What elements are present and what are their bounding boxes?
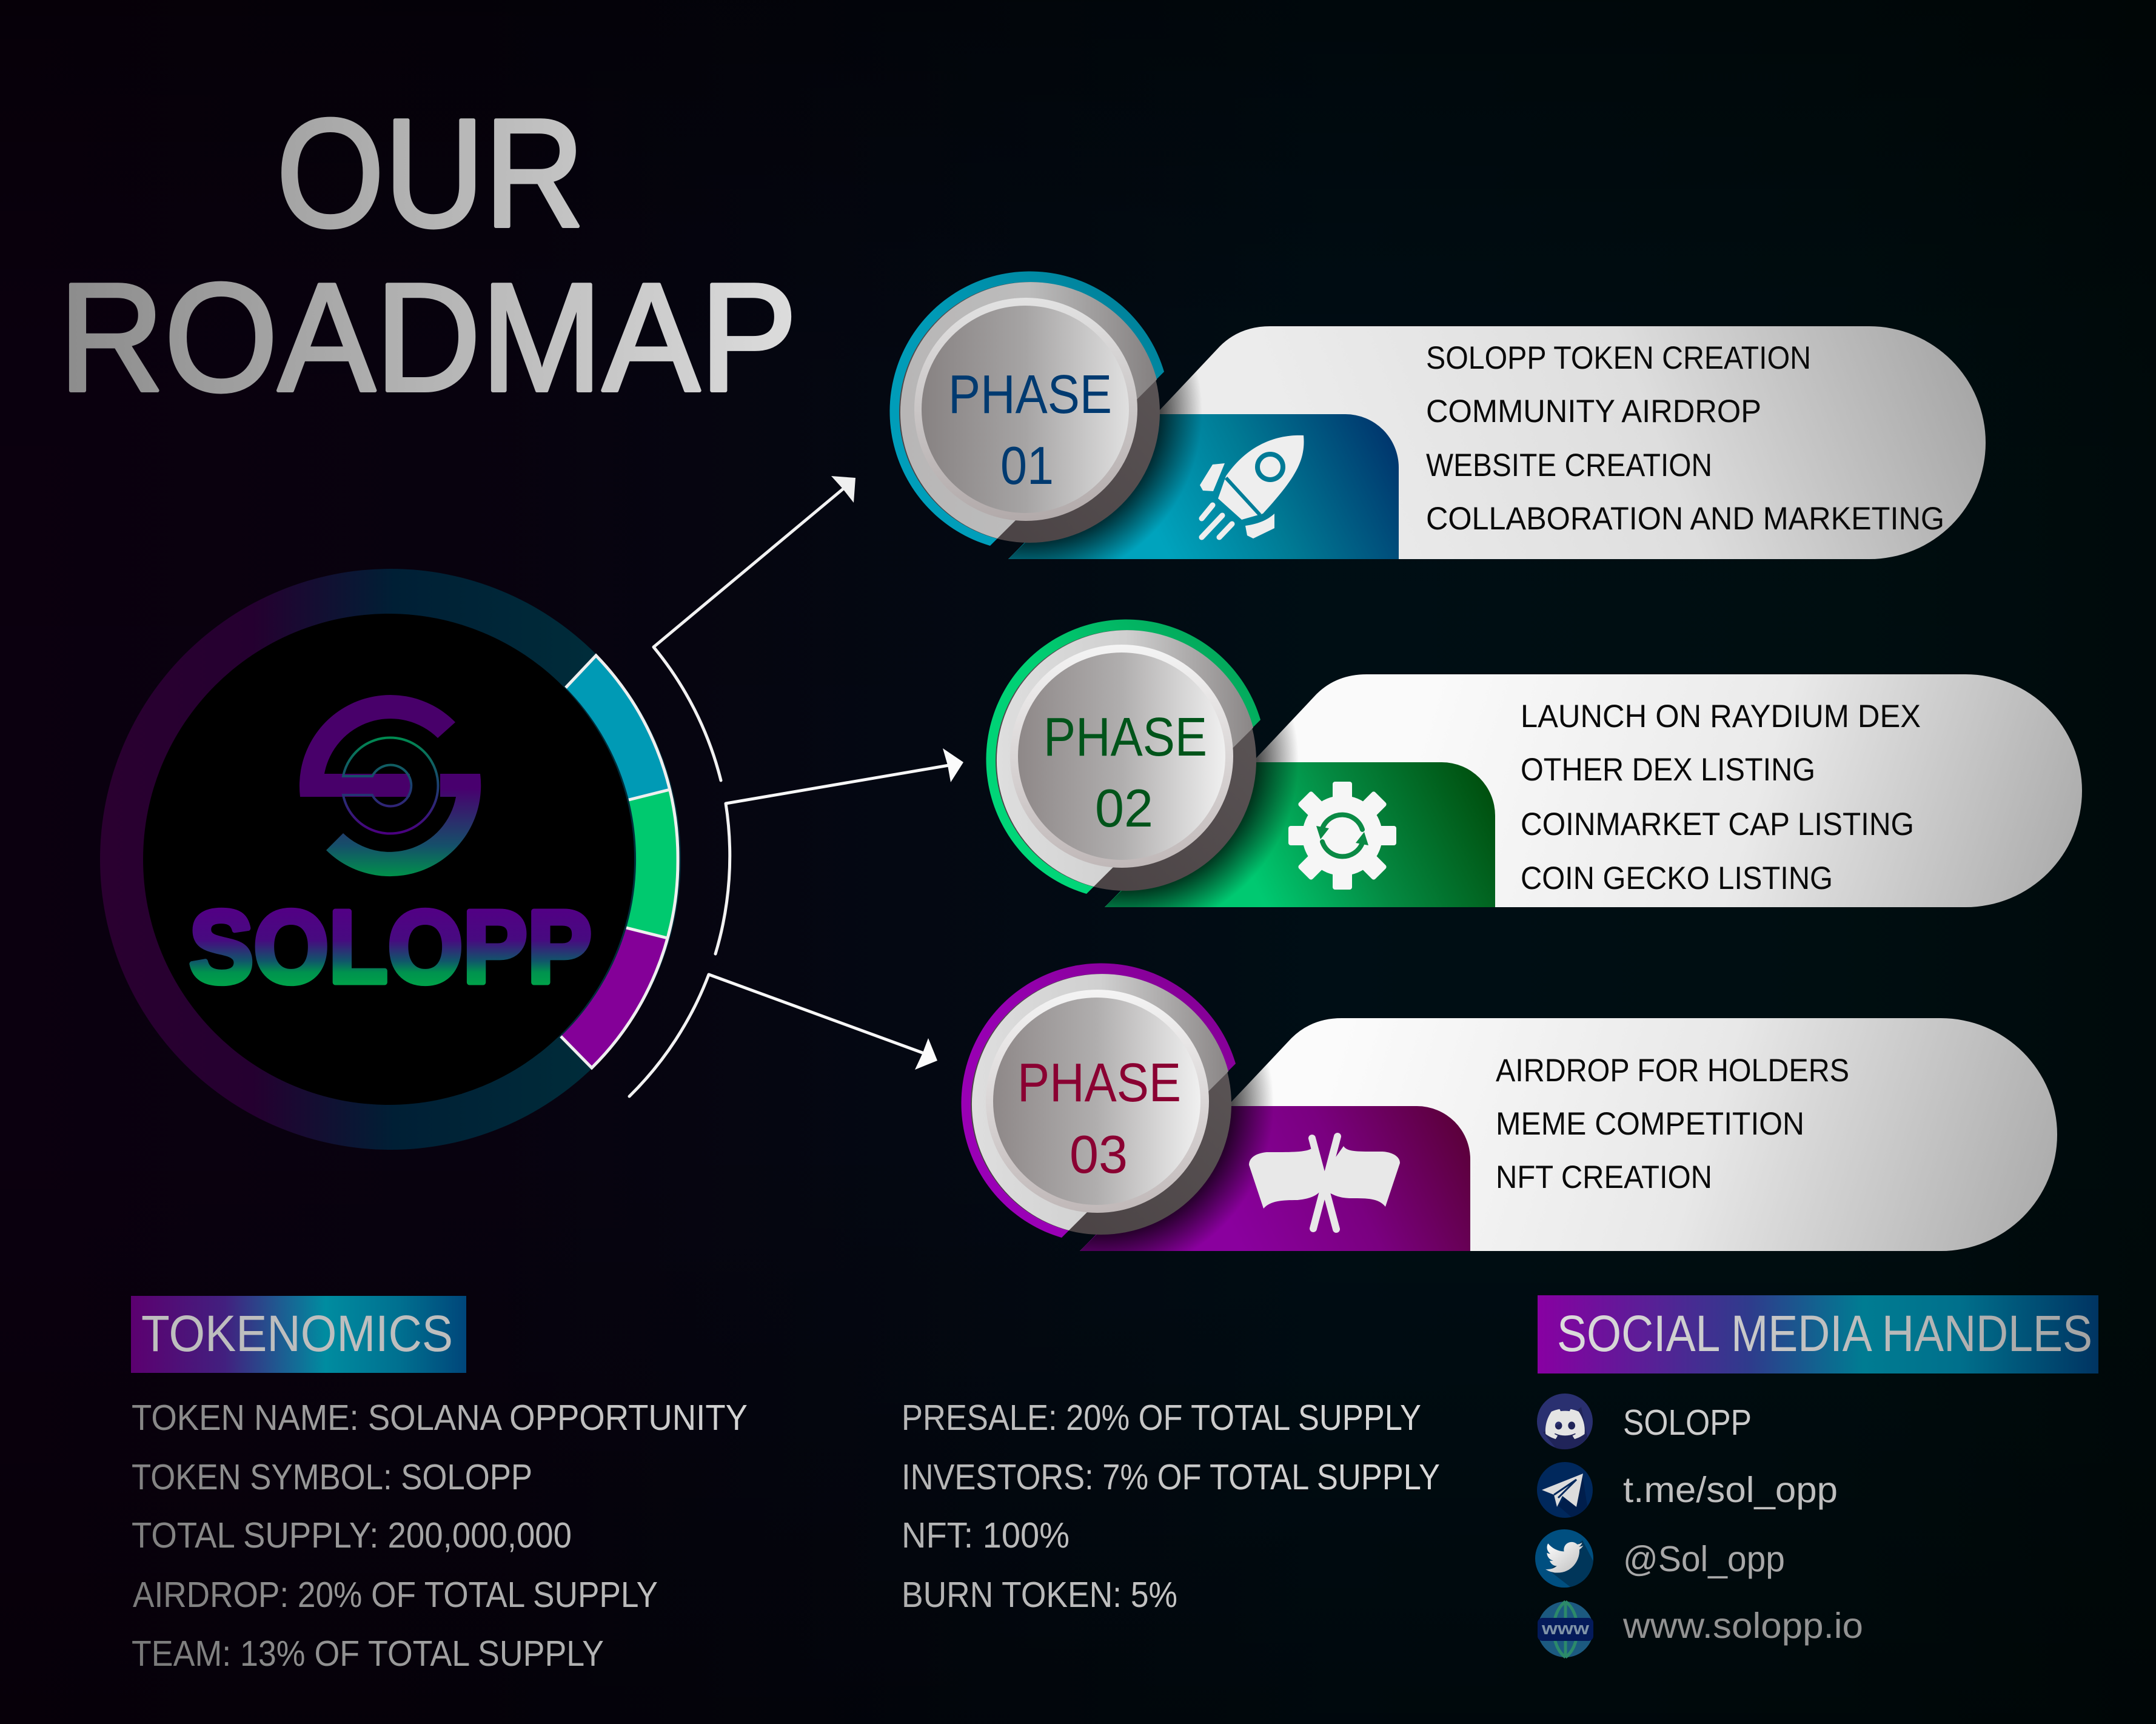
arrow to phase 01 (654, 476, 855, 647)
title (59, 87, 797, 423)
tokenomics middle column: PRESALE: 20% OF TOTAL SUPPLY (902, 1398, 1421, 1438)
phase 01 list: COLLABORATION AND MARKETING (1426, 501, 1944, 537)
social: twitter handle: @Sol_opp (1623, 1539, 1785, 1579)
tokenomics middle column: NFT: 100% (902, 1515, 1070, 1555)
phase 03 list: MEME COMPETITION (1496, 1106, 1804, 1142)
phase 01 list: WEBSITE CREATION (1426, 448, 1712, 483)
phase 03 label: PHASE (1017, 1053, 1181, 1113)
icon: rocket (1200, 435, 1304, 538)
tokenomics banner (131, 1296, 466, 1373)
phase 02 label (1043, 707, 1207, 838)
phase 02 list: LAUNCH ON RAYDIUM DEX (1521, 699, 1921, 734)
ring segment: green (626, 790, 678, 938)
icon: globe www: www (1541, 1619, 1590, 1638)
tokenomics left column (132, 1398, 748, 1674)
ring segment: blue (566, 656, 670, 800)
phase 01 label: 01 (1000, 435, 1054, 495)
social: discord handle: SOLOPP (1623, 1403, 1752, 1443)
phase 03 disc (961, 963, 1236, 1238)
connector arcs (629, 647, 730, 1096)
panel: phase 01 (889, 272, 1986, 559)
arrow to phase 03 (709, 974, 937, 1070)
icon: twitter (1535, 1529, 1593, 1588)
icon: telegram (1537, 1462, 1593, 1518)
tokenomics left column: TOKEN SYMBOL: SOLOPP (132, 1457, 532, 1497)
title: ROADMAP (59, 251, 797, 423)
logo circle with ring segments (100, 569, 681, 1150)
phase 02 disc (986, 619, 1260, 894)
phase 03 list (1496, 1053, 1849, 1195)
logo wordmark: SOLOPP (189, 890, 592, 1005)
phase 03 list: NFT CREATION (1496, 1159, 1712, 1195)
phase 01 list: SOLOPP TOKEN CREATION (1426, 340, 1811, 376)
arrow to phase 02 (726, 748, 963, 803)
phase 01 list: COMMUNITY AIRDROP (1426, 394, 1761, 429)
phase 01 disc (889, 271, 1164, 546)
tokenomics left column: TOTAL SUPPLY: 200,000,000 (132, 1515, 572, 1555)
phase 02 label: PHASE (1043, 707, 1207, 768)
icon: gear with sync arrows (1288, 782, 1396, 890)
phase 01 label (948, 364, 1112, 495)
phase 03 list: AIRDROP FOR HOLDERS (1496, 1053, 1849, 1088)
phase 02 list: COINMARKET CAP LISTING (1521, 807, 1914, 842)
social: website: www.solopp.io (1622, 1606, 1863, 1646)
tokenomics left column: TOKEN NAME: SOLANA OPPORTUNITY (132, 1398, 748, 1438)
phase 01 label: PHASE (948, 364, 1112, 425)
phase 03 label: 03 (1070, 1124, 1128, 1184)
tokenomics left column: TEAM: 13% OF TOTAL SUPPLY (132, 1634, 604, 1674)
tokenomics middle column: INVESTORS: 7% OF TOTAL SUPPLY (902, 1457, 1440, 1497)
tokenomics left column: AIRDROP: 20% OF TOTAL SUPPLY (133, 1575, 658, 1615)
social media banner: SOCIAL MEDIA HANDLES (1557, 1305, 2092, 1362)
phase 01 list (1426, 340, 1944, 537)
social media banner (1538, 1295, 2098, 1373)
phase 02 label: 02 (1095, 778, 1153, 838)
title: OUR (276, 87, 584, 259)
phase 02 list: COIN GECKO LISTING (1521, 860, 1833, 896)
tokenomics banner: TOKENOMICS (141, 1305, 453, 1362)
tokenomics middle column: BURN TOKEN: 5% (902, 1575, 1177, 1615)
icon: discord (1537, 1394, 1593, 1449)
panel: phase 02 (986, 620, 2082, 907)
social: telegram handle: t.me/sol_opp (1623, 1470, 1838, 1510)
phase 03 label (1017, 1053, 1181, 1184)
phase 02 list: OTHER DEX LISTING (1521, 752, 1815, 788)
icon: crossed flags (1249, 1136, 1400, 1229)
ring segment: purple (561, 928, 668, 1068)
panel: phase 03 (961, 963, 2057, 1251)
tokenomics middle column (902, 1398, 1440, 1615)
icon: globe www (1538, 1602, 1593, 1657)
phase 02 list (1521, 699, 1921, 896)
logo mark: S (300, 695, 481, 876)
